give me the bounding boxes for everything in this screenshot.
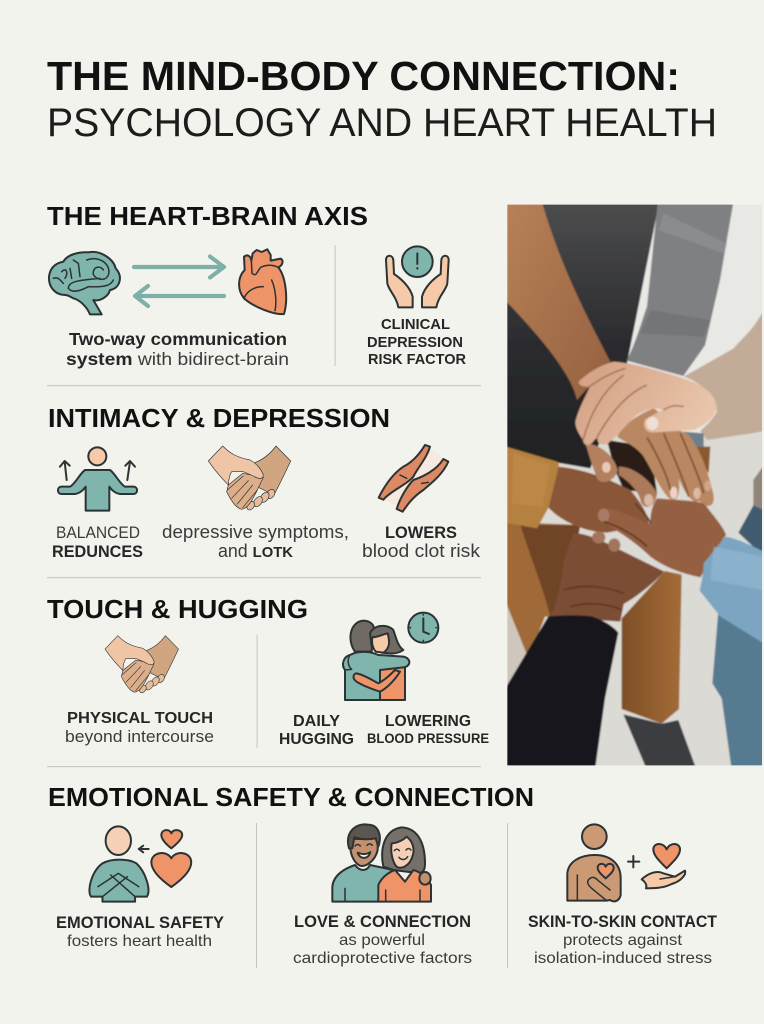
text: depressive symptoms: depressive symptoms, bbox=[162, 522, 349, 542]
text: clinical depression risk factor: DEPRESSION bbox=[367, 334, 463, 351]
text: lowering blood pressure: LOWERING bbox=[385, 713, 471, 730]
text: skin to skin contact: isolation-induced stress bbox=[534, 950, 712, 967]
text: daily hugging: HUGGING bbox=[279, 731, 354, 748]
text: balanced reduces: BALANCED bbox=[56, 524, 140, 542]
title: THE MIND-BODY CONNECTION: bbox=[47, 53, 680, 99]
panel: emotional safety and connection bbox=[48, 782, 717, 968]
heading: touch and hugging: TOUCH & HUGGING bbox=[47, 594, 308, 624]
divider: touch bbox=[257, 635, 258, 748]
text: physical touch bbox=[65, 710, 214, 746]
text: emotional safety: EMOTIONAL SAFETY bbox=[56, 914, 224, 932]
icon: brain bbox=[49, 252, 120, 314]
heading: heart-brain axis: THE HEART-BRAIN AXIS bbox=[47, 201, 368, 231]
panel: the heart-brain axis bbox=[47, 201, 466, 369]
photo: stacked hands bbox=[500, 197, 764, 773]
title: PSYCHOLOGY AND HEART HEALTH bbox=[47, 101, 717, 145]
text: lowers blood clot risk bbox=[362, 523, 481, 561]
text: emotional safety bbox=[56, 914, 224, 950]
panel: touch and hugging bbox=[47, 594, 489, 748]
text: two-way communication bbox=[66, 329, 289, 369]
icon: handshake small bbox=[105, 636, 179, 694]
text: clinical depression risk factor: CLINICAL bbox=[381, 316, 450, 333]
text: emotional safety: fosters heart health bbox=[67, 933, 212, 950]
text: two-way communication: system with bidirect-brain bbox=[66, 349, 289, 369]
icon: hugging couple with clock bbox=[343, 613, 438, 700]
text: skin to skin contact: SKIN-TO-SKIN CONTACT bbox=[528, 913, 717, 931]
text: lowers blood clot risk: LOWERS bbox=[385, 523, 457, 542]
text: daily hugging bbox=[279, 713, 354, 748]
icon: blood vessels bbox=[379, 445, 448, 512]
text: physical touch: beyond intercourse bbox=[65, 728, 214, 746]
divider: love bbox=[507, 823, 508, 968]
icon: balanced person bbox=[58, 447, 137, 511]
heading: intimacy and depression: INTIMACY & DEPRESSION bbox=[48, 403, 390, 433]
text: lowering blood pressure bbox=[367, 713, 489, 746]
icon: couple bbox=[332, 824, 431, 902]
text: clinical depression risk factor bbox=[367, 316, 466, 368]
text: love and connection: as powerful bbox=[339, 932, 425, 949]
text: lowers blood clot risk: blood clot risk bbox=[362, 541, 481, 561]
text: depressive symptoms bbox=[162, 522, 349, 561]
text: love and connection bbox=[293, 913, 472, 967]
icon: skin to skin bbox=[567, 824, 685, 901]
text: depressive symptoms: and LOTK bbox=[218, 541, 293, 561]
text: skin to skin contact: protects against bbox=[563, 932, 683, 949]
title bbox=[47, 53, 717, 145]
text: love and connection: cardioprotective factors bbox=[293, 950, 472, 967]
arrow: brain to heart bbox=[134, 256, 224, 278]
icon: heart organ bbox=[239, 249, 286, 314]
icon: handshake bbox=[208, 446, 291, 511]
text: lowering blood pressure: BLOOD PRESSURE bbox=[367, 731, 489, 746]
text: two-way communication: Two-way communication bbox=[69, 329, 287, 349]
icon: person with hearts bbox=[89, 826, 191, 902]
icon: hands holding alert bbox=[386, 246, 449, 307]
text: clinical depression risk factor: RISK FACTOR bbox=[368, 351, 466, 368]
arrow: heart to brain bbox=[135, 286, 224, 306]
text: love and connection: LOVE & CONNECTION bbox=[294, 913, 471, 931]
text: balanced reduces: REDUNCES bbox=[52, 543, 143, 561]
heading: emotional safety and connection: EMOTIONAL SAFETY & CONNECTION bbox=[48, 782, 534, 812]
divider: safety bbox=[256, 823, 257, 968]
text: physical touch: PHYSICAL TOUCH bbox=[67, 710, 213, 727]
text: balanced reduces bbox=[52, 524, 143, 561]
panel: intimacy and depression bbox=[48, 403, 481, 561]
text: daily hugging: DAILY bbox=[293, 713, 340, 730]
divider: axis bbox=[335, 245, 336, 366]
text: skin to skin contact bbox=[528, 913, 717, 967]
